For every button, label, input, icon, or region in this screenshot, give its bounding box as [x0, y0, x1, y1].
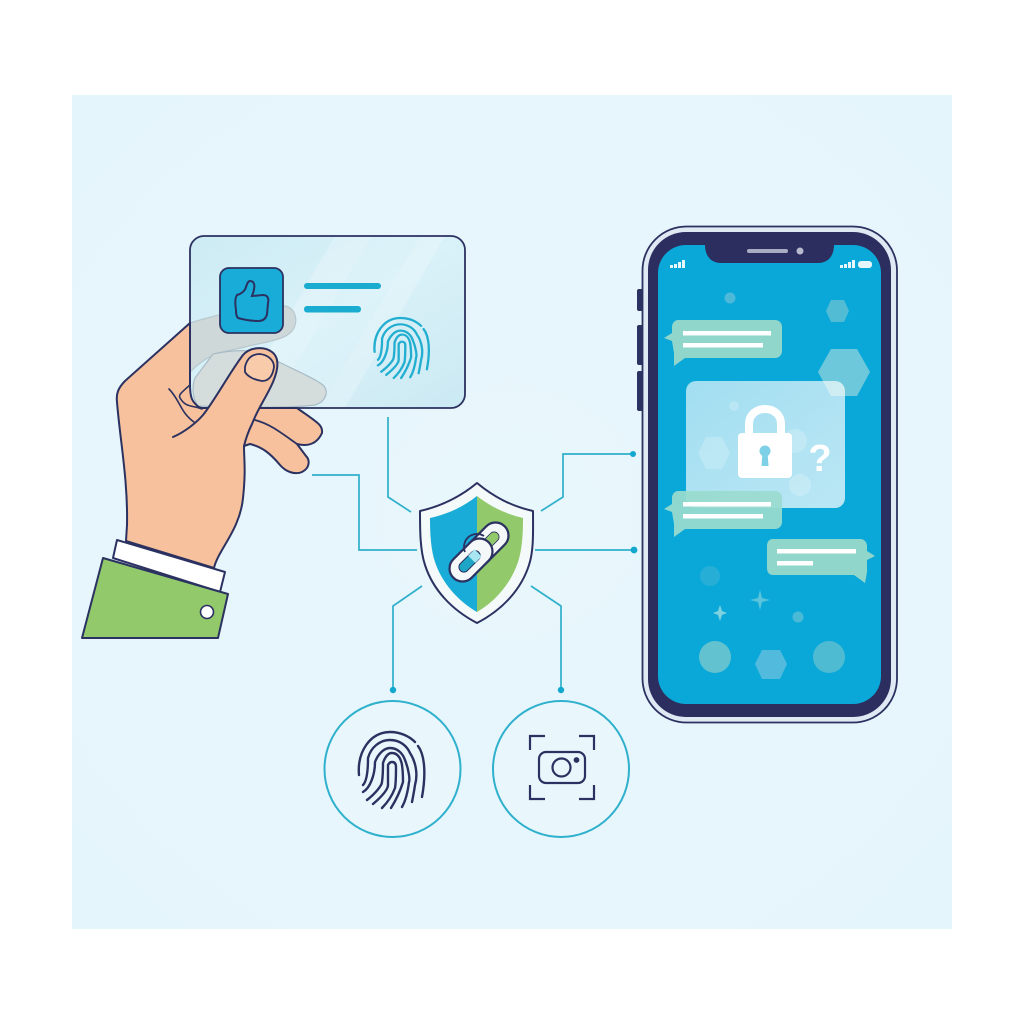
phone: speaker and camera: [747, 248, 804, 254]
screen: floating shapes: [699, 292, 870, 679]
chat bubble middle: [664, 491, 782, 537]
phone: side buttons: [637, 289, 643, 411]
illustration: linked identity security: [72, 95, 952, 929]
chain: lower link: [444, 533, 498, 587]
card: translucent index finger: [190, 306, 296, 372]
hand holding the card: [117, 323, 322, 568]
shield: blue half: [430, 496, 477, 612]
chat bubble top: [664, 320, 782, 366]
hand: curled finger crease: [169, 385, 202, 422]
phone: body: [642, 226, 897, 722]
phone: status icons right: [840, 260, 872, 268]
phone: status icons left: [670, 260, 685, 268]
icon: fingerprint: [359, 732, 424, 808]
card: fingerprint: [374, 318, 429, 378]
hand: thumb: [173, 348, 277, 446]
glass lock panel: [686, 381, 845, 508]
phone: notch: [705, 245, 834, 263]
hand: palm and fingers: [117, 323, 322, 568]
card: text lines: [304, 283, 381, 312]
camera circle: [493, 701, 629, 837]
card outline: [190, 236, 465, 408]
icon: camera with focus brackets: [530, 736, 594, 799]
chat bubble lower: [767, 539, 875, 583]
hand: finger separator: [255, 420, 297, 444]
green sleeve: [82, 558, 228, 638]
panel: question mark: ?: [808, 438, 832, 480]
panel: padlock: [738, 409, 792, 478]
chain: upper link: [460, 517, 514, 571]
fingerprint circle: [324, 701, 460, 837]
panel: faint shapes: [698, 401, 811, 496]
connector lines: [312, 417, 637, 693]
card: thumbs-up badge: [220, 268, 283, 333]
phone: screen: [658, 245, 881, 704]
background panel: [72, 95, 952, 929]
shield with chain link: [420, 483, 533, 623]
sleeve button: [200, 606, 214, 618]
shirt cuff: [113, 540, 225, 592]
smartphone: [637, 226, 897, 722]
hand: thumbnail: [245, 354, 274, 381]
hand: thumb outline: [173, 348, 277, 446]
shield: green half: [477, 496, 523, 612]
chain: link overlap: [464, 534, 484, 552]
transparent ID card: [190, 236, 465, 408]
card: translucent middle finger: [193, 351, 326, 407]
